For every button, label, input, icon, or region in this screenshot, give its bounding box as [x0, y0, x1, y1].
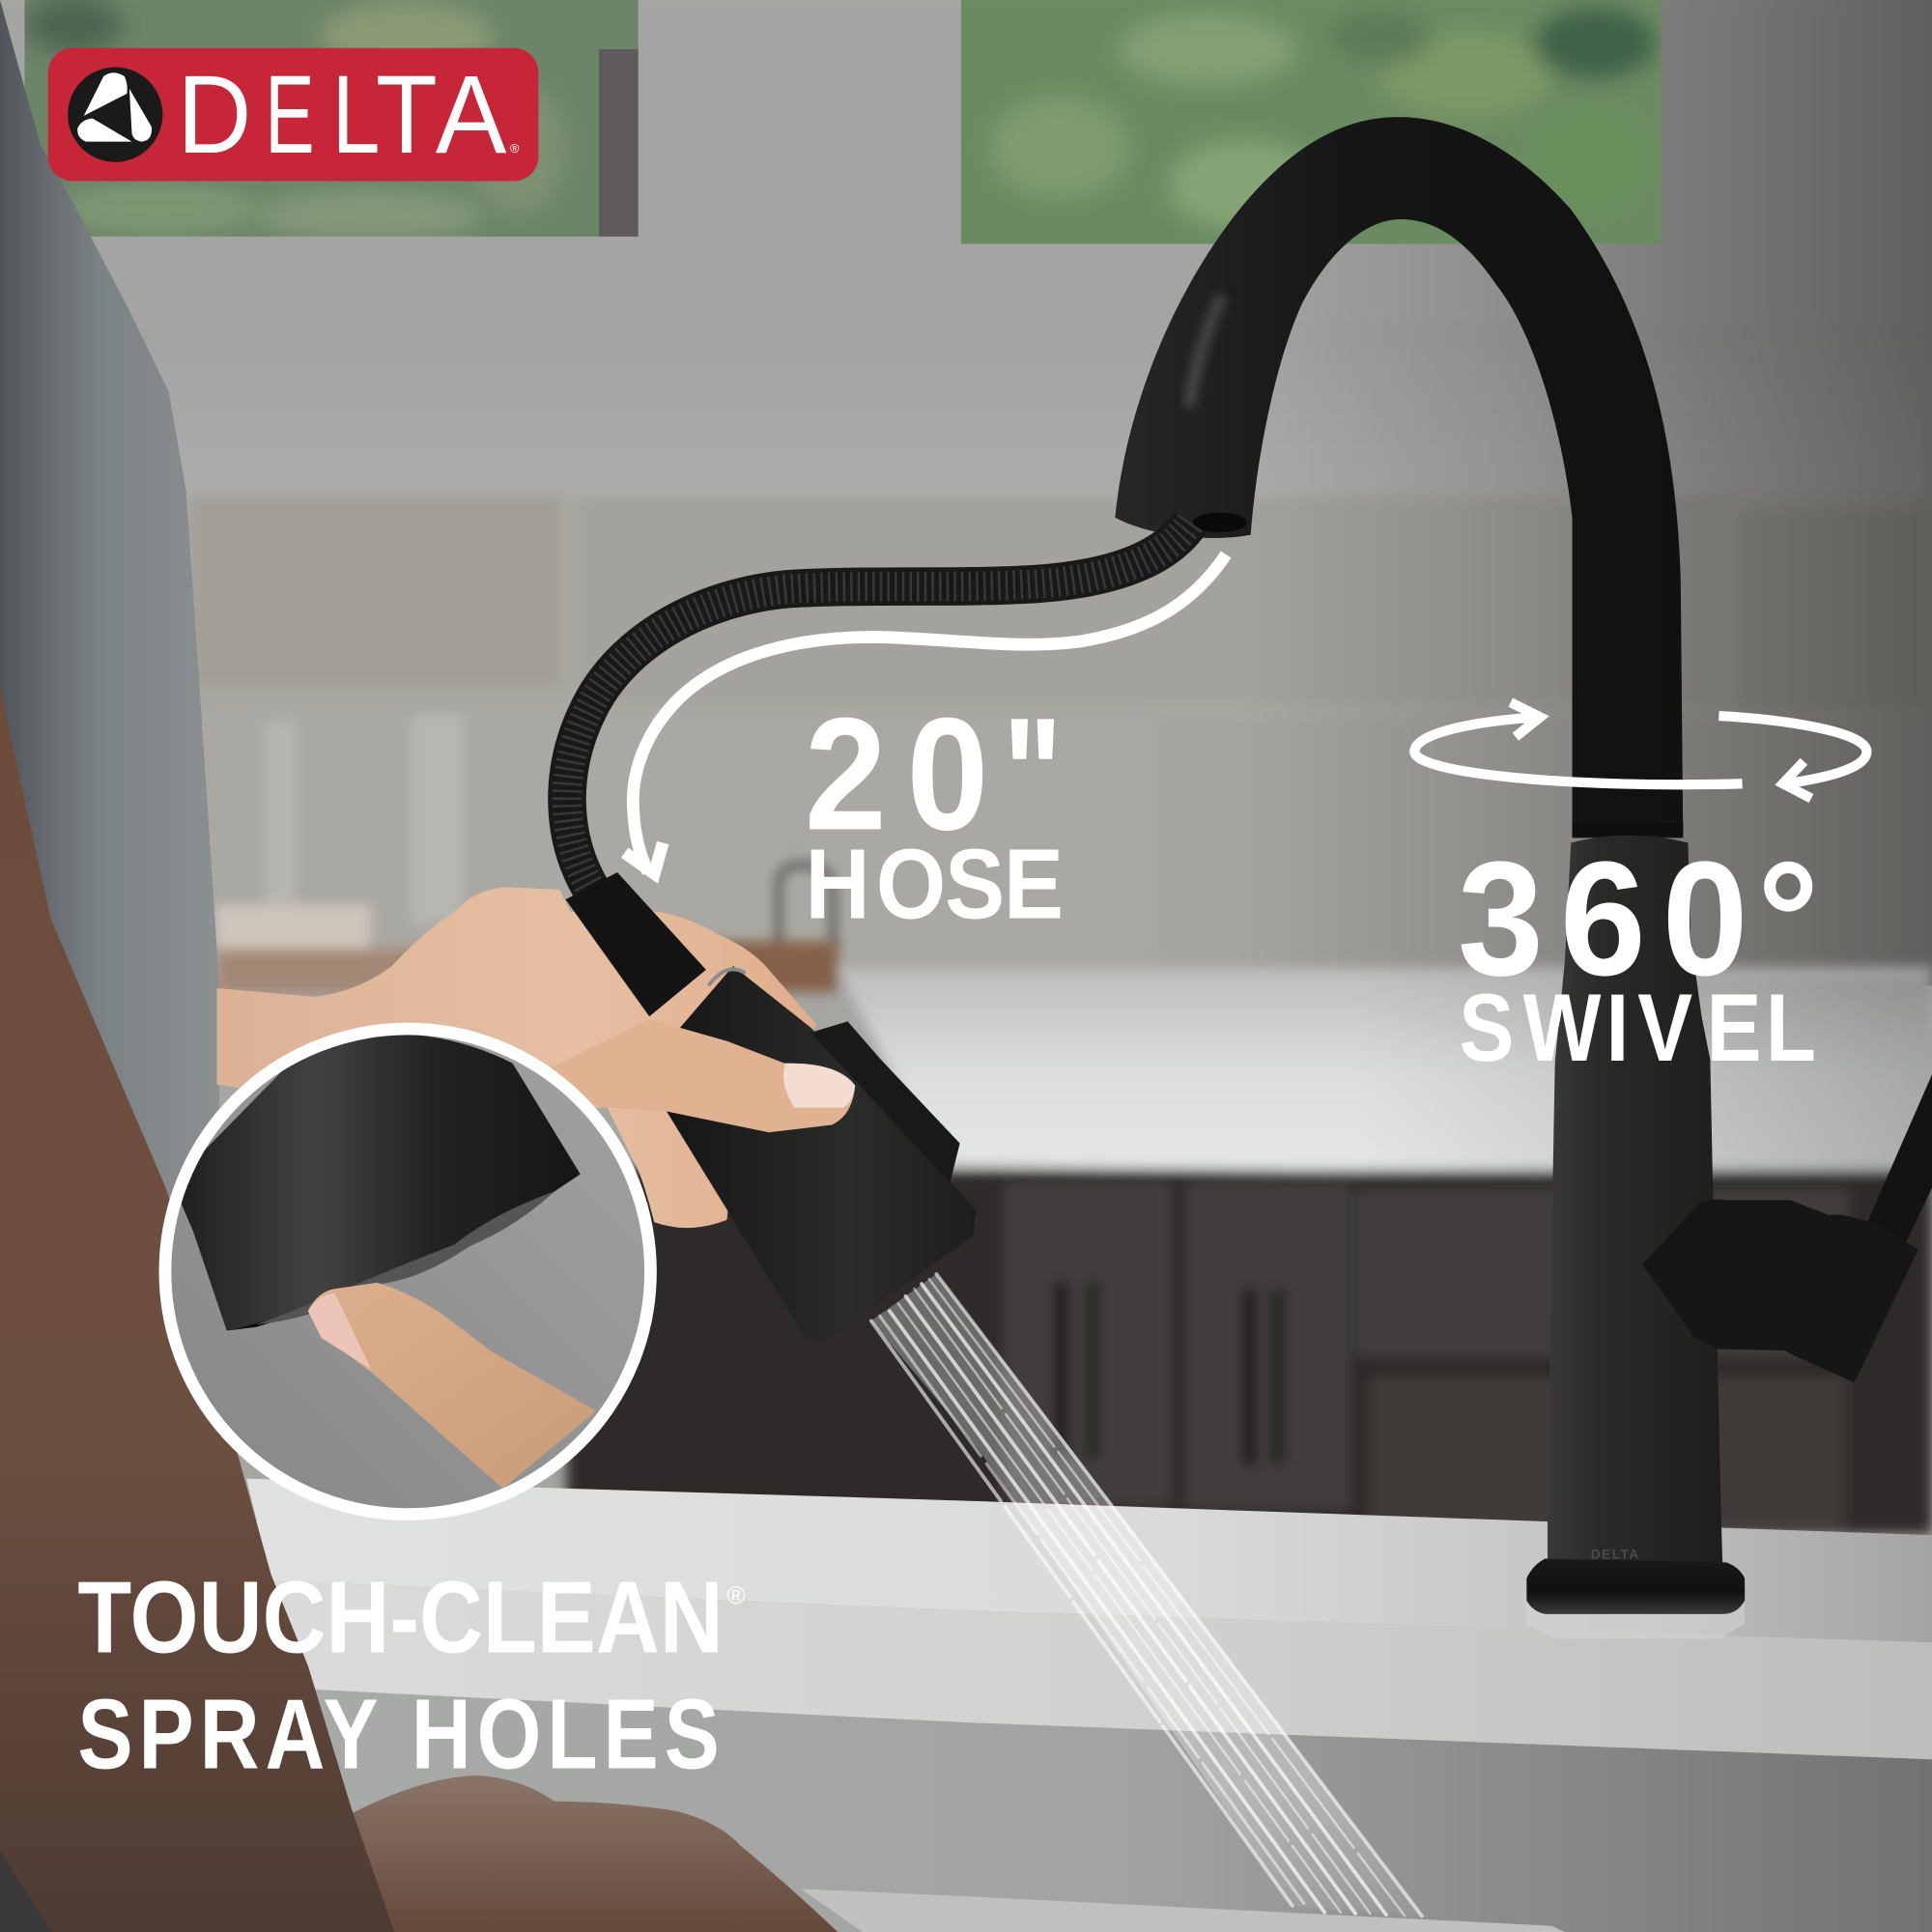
faucet base: [1526, 1559, 1745, 1614]
callout: 360 degree swivel: 360°: [1458, 827, 1819, 1009]
lower hand: [332, 1776, 838, 1932]
head collar: [565, 872, 706, 1016]
faucet: [1115, 117, 1932, 1638]
logo wordmark: [177, 52, 520, 177]
inset circle: touch-clean nozzle: [165, 1029, 650, 1515]
person shirt: [0, 0, 219, 1244]
callout: 20 inch hose: HOSE: [806, 828, 1064, 939]
logo wordmark: ®: [510, 141, 520, 156]
right window: [960, 0, 1662, 243]
palm and fingers: [216, 887, 817, 1228]
hand holding sprayer: [216, 887, 817, 1228]
spray head: [565, 872, 976, 1343]
base reflection: [1526, 1602, 1745, 1638]
water spray: [871, 1274, 1422, 1916]
hose length arrow: [625, 554, 1226, 873]
logo: Delta: [48, 48, 538, 181]
logo wordmark: D: [177, 54, 252, 177]
faucet body: [1548, 836, 1722, 1562]
faucet body mark: DELTA: [1591, 1547, 1638, 1562]
thumb nail: [783, 1064, 855, 1108]
callout: 20 inch hose: ": [1003, 684, 1063, 864]
callout: touch-clean spray holes: SPRAY HOLES: [77, 1679, 725, 1790]
hose: [567, 523, 1190, 890]
head button: [810, 1021, 960, 1182]
swivel arrows: [1414, 702, 1866, 799]
thumb: [542, 1019, 855, 1132]
logo wordmark: T: [376, 54, 438, 177]
sink counter: [246, 1479, 1932, 1642]
logo wordmark: E: [265, 53, 315, 177]
callout: touch-clean spray holes: TOUCH-CLEAN: [77, 1560, 724, 1674]
callout: 20 inch hose: 20: [805, 685, 988, 864]
faucet handle: [1642, 1199, 1918, 1382]
nozzle: [173, 1034, 581, 1331]
head body: [667, 966, 976, 1343]
callout: 20 inch hose: [805, 684, 1064, 939]
left window: [25, 0, 639, 237]
logo mark: [68, 68, 162, 162]
faucet neck: [1115, 117, 1683, 838]
person arm: [0, 688, 394, 1932]
logo wordmark: A: [436, 52, 506, 177]
callout: touch-clean spray holes: [77, 1560, 746, 1790]
callout: 360 degree swivel: SWIVEL: [1459, 974, 1816, 1082]
callout: touch-clean spray holes: ®: [727, 1583, 746, 1610]
logo wordmark: L: [332, 52, 380, 177]
fingertip: [308, 1283, 596, 1489]
